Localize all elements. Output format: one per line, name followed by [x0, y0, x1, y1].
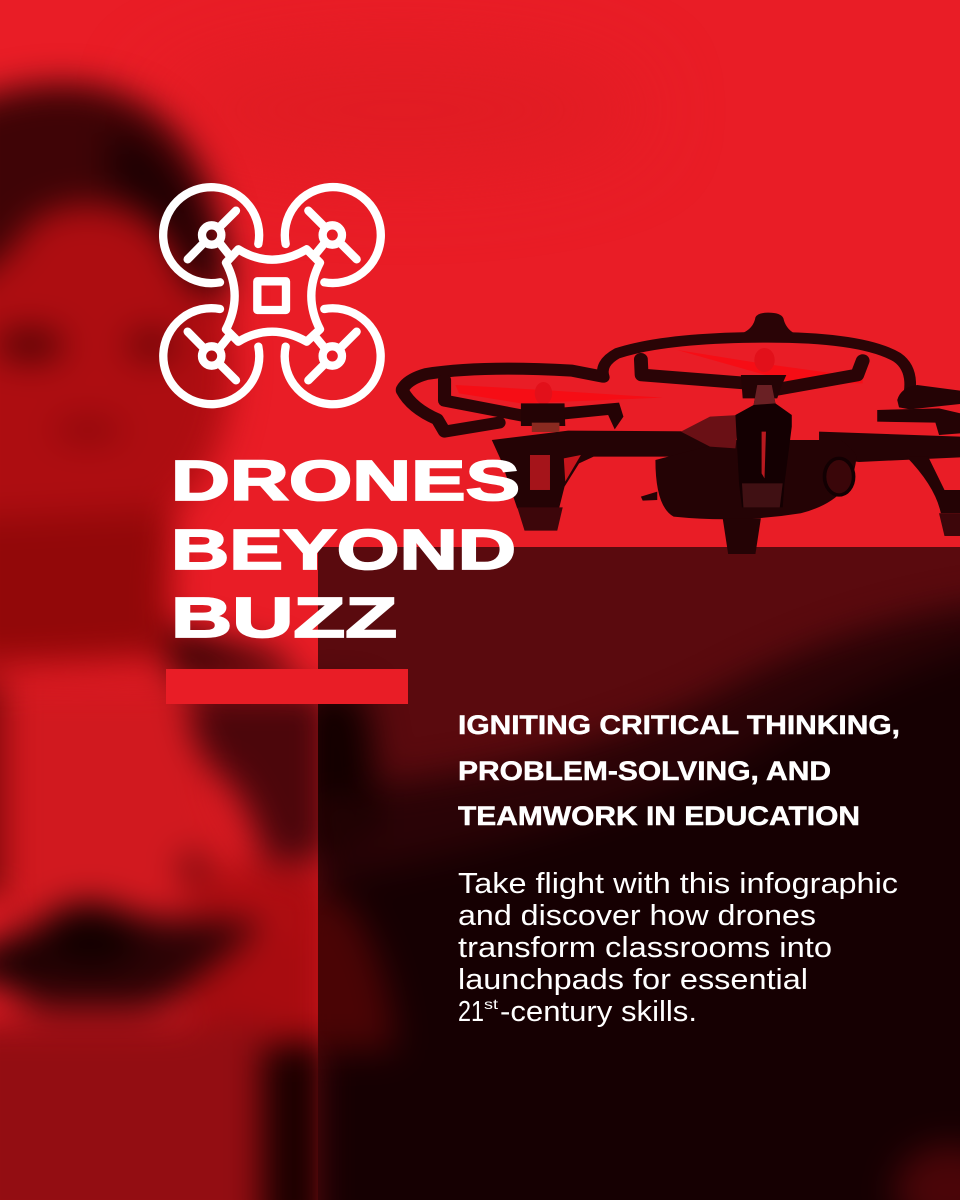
- child head: [0, 190, 233, 670]
- body text: Take flight with this infographic: [458, 868, 898, 900]
- collar shadow: [170, 625, 300, 680]
- top-left rotor: [163, 187, 259, 283]
- controller: [0, 904, 270, 1010]
- body text: st: [484, 996, 498, 1012]
- hair: [0, 83, 232, 295]
- battery core: [735, 385, 792, 507]
- title: DRONES: [171, 449, 520, 513]
- red gap beside left leg: [564, 455, 581, 482]
- arm: [189, 690, 330, 865]
- neck shading: [0, 510, 170, 660]
- subtitle: IGNITING CRITICAL THINKING,: [458, 710, 900, 740]
- body text: 21: [458, 996, 484, 1028]
- eyes and mouth: [0, 330, 64, 360]
- silver motor ring: [532, 423, 559, 432]
- shirt: [0, 671, 256, 934]
- hull: [655, 440, 857, 519]
- bottom-right rotor: [285, 308, 381, 404]
- body text: transform classrooms into: [458, 932, 832, 964]
- subtitle: TEAMWORK IN EDUCATION: [458, 801, 860, 831]
- body text: launchpads for essential: [458, 964, 808, 996]
- bottom-left rotor: [163, 308, 259, 404]
- guard nub: [742, 313, 794, 333]
- hand: [190, 869, 330, 1050]
- right arm: [819, 432, 960, 462]
- drone body: [226, 249, 320, 342]
- wing sheen: [681, 415, 739, 448]
- title: BUZZ: [171, 586, 397, 650]
- left motor: [521, 403, 565, 426]
- lower body: [0, 1020, 265, 1200]
- red accent bar: [166, 669, 408, 704]
- body text: [458, 868, 898, 1028]
- propeller blades: [455, 348, 863, 405]
- body text: and discover how drones: [458, 900, 816, 932]
- right guard ring 3: [897, 385, 960, 409]
- icon: drone logo: [163, 187, 381, 404]
- top-right rotor: [285, 187, 381, 283]
- title: [171, 449, 520, 650]
- bottom post: [723, 518, 761, 554]
- background: blurred child photo in red: [0, 56, 318, 1200]
- left skid: [565, 403, 623, 429]
- red highlight in motor housing: [530, 455, 550, 490]
- right strut: [906, 457, 960, 513]
- camera: [825, 458, 854, 495]
- dark panel: [290, 547, 960, 1200]
- right motor mount: [741, 375, 786, 398]
- feet: [517, 507, 563, 531]
- subtitle: PROBLEM-SOLVING, AND: [458, 756, 831, 786]
- drone photograph: [402, 313, 960, 554]
- title: BEYOND: [171, 518, 516, 582]
- frame arm: [492, 431, 735, 508]
- subtitle: [458, 710, 900, 831]
- body text: -century skills.: [500, 996, 697, 1028]
- centre square: [257, 281, 286, 310]
- left guard ring: [402, 369, 603, 389]
- right guard ring: [402, 337, 910, 432]
